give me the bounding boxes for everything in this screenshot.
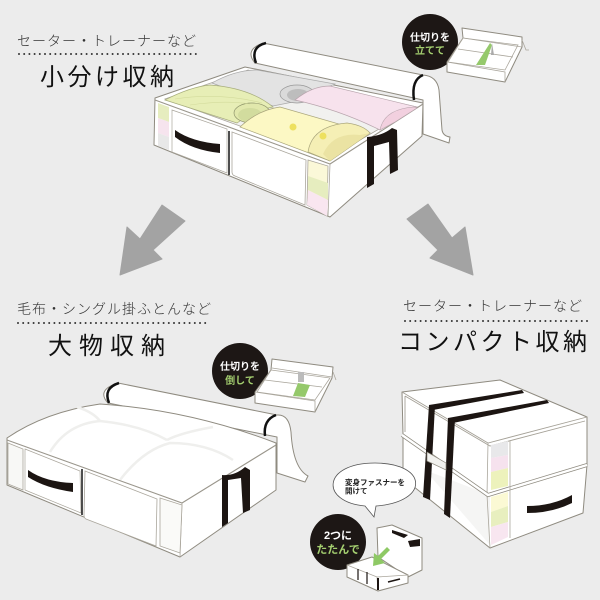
heading: small division storage xyxy=(17,33,197,91)
speech bubble xyxy=(333,463,416,517)
black circle label: 仕切りを xyxy=(410,31,450,44)
mini tray xyxy=(255,359,336,412)
heading: large item storage xyxy=(17,301,212,360)
case body with futon top xyxy=(7,404,276,557)
black circle label: 立てて xyxy=(415,44,445,57)
end window xyxy=(8,443,23,490)
black circle label: fold in two xyxy=(310,514,366,570)
arrow: down right xyxy=(407,204,473,275)
illustration: futon storage case xyxy=(7,383,308,557)
heading: small division storage: セーター・トレーナーなど xyxy=(17,33,197,49)
handle xyxy=(527,495,572,513)
front panels and zipper xyxy=(25,449,157,546)
case body xyxy=(154,67,423,217)
black circle label: 倒して xyxy=(225,374,255,387)
side clothes window xyxy=(491,441,510,545)
heading: large item storage: 毛布・シングル掛ふとんなど xyxy=(17,301,212,317)
heading: small division storage: 小分け収納 xyxy=(40,64,178,91)
arrow: down left xyxy=(120,205,185,275)
pink sweater xyxy=(295,86,417,130)
inset: divider standing xyxy=(402,14,529,82)
green sweater xyxy=(165,85,273,123)
side window with stacked clothes xyxy=(158,103,328,216)
black circle label xyxy=(402,14,458,70)
inset: divider folded xyxy=(212,343,336,412)
gray sweater xyxy=(212,70,335,106)
yellow sweater xyxy=(240,107,370,161)
heading: compact storage xyxy=(398,298,590,356)
handle xyxy=(175,130,220,153)
speech bubble: 変身ファスナーを xyxy=(345,477,405,487)
rolled lid xyxy=(251,43,450,143)
front clasp xyxy=(427,452,446,470)
black circle label: fold in two: たたんで xyxy=(316,543,360,556)
strap xyxy=(222,467,250,527)
handle xyxy=(28,470,73,492)
seam between boxes xyxy=(402,435,587,495)
icon: folding box xyxy=(347,525,422,591)
black circle label: 仕切りを xyxy=(220,360,260,373)
heading: compact storage: コンパクト収納 xyxy=(398,329,590,356)
illustration: stacked compact boxes xyxy=(402,380,587,548)
illustration: open divided storage case xyxy=(154,43,450,217)
side window xyxy=(160,498,182,553)
green arrow xyxy=(373,547,390,566)
speech bubble: 開けて xyxy=(345,486,368,496)
box body xyxy=(402,380,587,548)
straps xyxy=(423,390,549,518)
mini tray xyxy=(447,28,529,82)
front panels and zipper xyxy=(172,110,306,205)
black circle label: fold in two: 2つに xyxy=(324,529,352,542)
heading: compact storage: セーター・トレーナーなど xyxy=(403,298,583,314)
heading: large item storage: 大物収納 xyxy=(48,333,172,360)
rolled lid xyxy=(104,383,308,482)
strap xyxy=(367,128,398,188)
black circle label xyxy=(212,343,268,399)
